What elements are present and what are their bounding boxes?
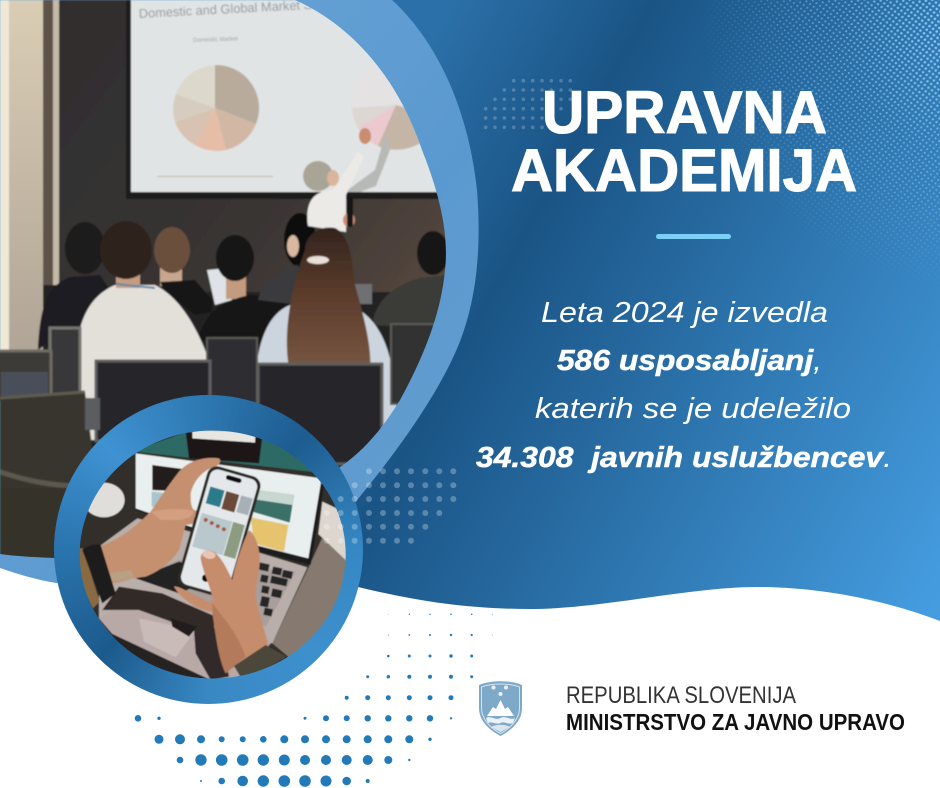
title: UPRAVNA — [542, 79, 827, 146]
statistics text: katerih se je udeležilo — [535, 393, 851, 425]
hero photo: presentation audience — [0, 0, 456, 570]
halftone dots top right — [716, 0, 940, 270]
statistics text — [476, 297, 892, 474]
small circular photo: hands with smartphone — [77, 428, 351, 683]
hero photo: presentation audience: Domestic Market — [193, 36, 238, 44]
ministry name: REPUBLIKA SLOVENIJA — [566, 682, 796, 709]
dot grid behind title — [484, 79, 572, 129]
title: AKADEMIJA — [511, 137, 857, 204]
statistics text: Leta 2024 je izvedla — [541, 297, 828, 329]
translucent dot grid over rings — [324, 468, 456, 544]
halftone dots at bottom on white — [135, 614, 493, 787]
small photo, text and footer — [80, 90, 904, 736]
statistics text: 586 usposabljanj , — [557, 345, 822, 377]
icon: coat of arms of Slovenia — [479, 681, 522, 736]
title underline — [656, 234, 731, 239]
blue gradient ring of small circle — [54, 395, 363, 704]
title — [511, 79, 857, 204]
statistics text: 34.308 javnih uslužbencev . — [476, 442, 892, 474]
white wave — [0, 568, 940, 788]
ministry name — [566, 682, 905, 735]
light blue ring around hero photo — [0, 0, 479, 640]
